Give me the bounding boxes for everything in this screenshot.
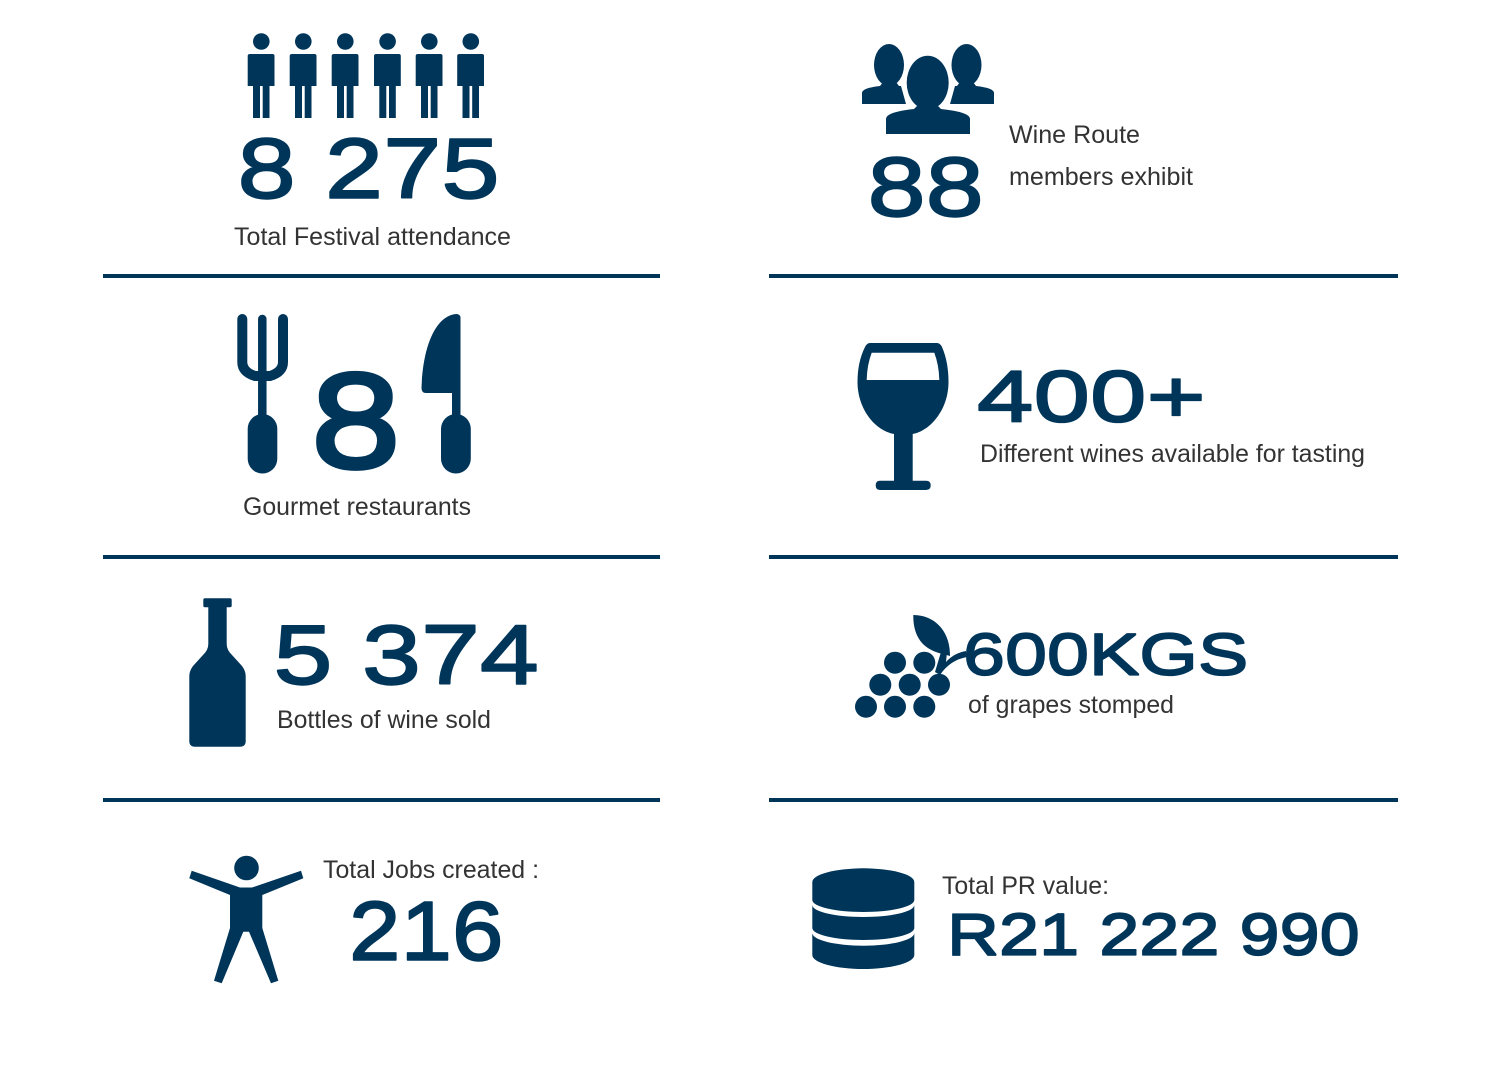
icon: stacked coins bbox=[812, 868, 914, 969]
panel: bottles sold bbox=[189, 598, 539, 747]
label: total festival attendance: Total Festival attendance bbox=[234, 223, 511, 251]
icon: six people bbox=[248, 33, 484, 118]
icon: knife bbox=[422, 314, 471, 474]
number: 216: 216 bbox=[349, 885, 504, 977]
icon: wine glass bbox=[858, 343, 948, 490]
number: 88: 88 bbox=[868, 141, 984, 234]
icon: three people bbox=[862, 44, 994, 134]
text: wine route members exhibit: Wine Route bbox=[1009, 121, 1140, 149]
panel: jobs created bbox=[189, 856, 539, 983]
icon: wine bottle bbox=[189, 598, 246, 747]
panel: festival attendance bbox=[234, 33, 511, 251]
label: total PR value: Total PR value: bbox=[942, 872, 1109, 900]
number: 5 374: 5 374 bbox=[274, 609, 539, 702]
label: different wines available for tasting: Different wines available for tasting bbox=[980, 440, 1365, 468]
panel: PR value bbox=[812, 868, 1360, 969]
label: total jobs created: Total Jobs created : bbox=[323, 856, 539, 884]
icon: fork bbox=[242, 319, 283, 474]
panel: gourmet restaurants bbox=[242, 314, 471, 521]
text: wine route members exhibit bbox=[1009, 121, 1193, 191]
label: gourmet restaurants: Gourmet restaurants bbox=[243, 493, 471, 521]
panel: wine route members bbox=[862, 44, 1193, 234]
panel: wines for tasting bbox=[858, 343, 1365, 490]
text: wine route members exhibit: members exhibit bbox=[1009, 163, 1193, 191]
label: of grapes stomped: of grapes stomped bbox=[968, 691, 1174, 719]
number: 8 275: 8 275 bbox=[238, 122, 500, 216]
icon: grapes bbox=[855, 615, 967, 718]
number: R21 222 990: R21 222 990 bbox=[947, 902, 1360, 967]
number: 8: 8 bbox=[311, 347, 401, 496]
number: 400+: 400+ bbox=[977, 356, 1206, 437]
number: 600KGS: 600KGS bbox=[963, 623, 1248, 687]
icon: person with arms raised bbox=[189, 856, 303, 983]
panel: grapes stomped bbox=[855, 615, 1248, 719]
label: bottles of wine sold: Bottles of wine sold bbox=[277, 706, 491, 734]
